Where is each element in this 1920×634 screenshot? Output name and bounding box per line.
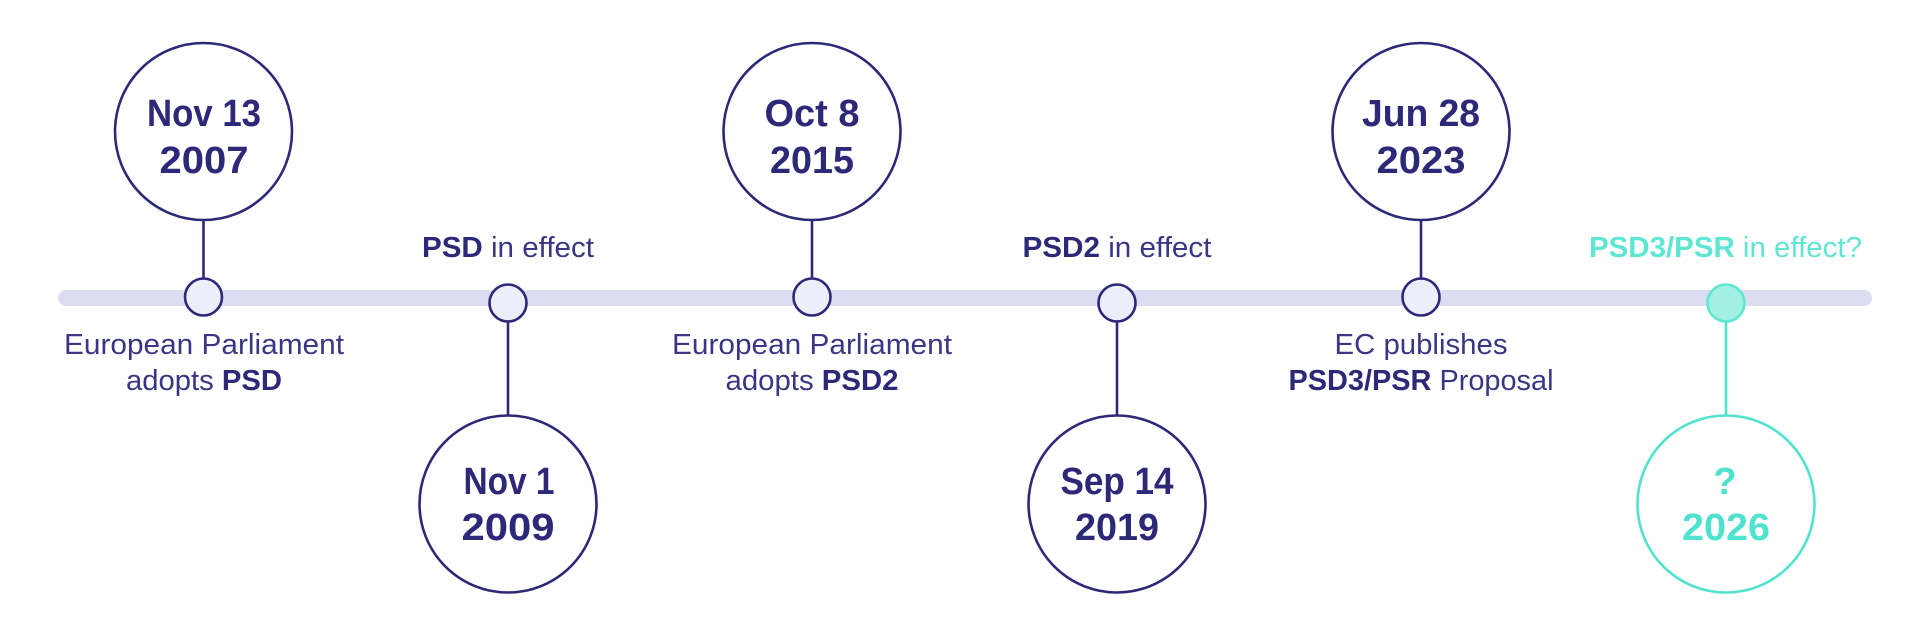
- date circle: [1028, 416, 1206, 592]
- date circle: [724, 43, 900, 220]
- date circle: [1332, 43, 1510, 220]
- timeline node: [490, 284, 526, 322]
- caption: [672, 329, 952, 397]
- timeline node: [794, 278, 830, 316]
- caption: PSD3/PSR Proposal: [1288, 365, 1554, 397]
- connector line: [1725, 321, 1727, 416]
- date text: 2015: [770, 140, 854, 182]
- date text: [147, 93, 261, 182]
- connector line: [1116, 321, 1118, 416]
- date text: 2007: [160, 140, 248, 182]
- date text: ?: [1713, 461, 1737, 503]
- caption: PSD2 in effect: [1022, 232, 1212, 264]
- date text: Nov 13: [147, 93, 261, 135]
- date text: Nov 1: [464, 461, 554, 503]
- date text: 2009: [462, 507, 554, 549]
- date text: [462, 461, 554, 549]
- timeline node: [185, 278, 222, 316]
- caption: PSD in effect: [422, 232, 594, 264]
- caption: EC publishes: [1334, 329, 1508, 361]
- caption: adopts PSD2: [726, 365, 898, 397]
- connector line: [1420, 220, 1422, 280]
- timeline node: [1098, 284, 1136, 322]
- caption: [64, 329, 344, 397]
- caption: PSD3/PSR in effect?: [1589, 232, 1862, 264]
- milestone: Nov 13 2007: [64, 43, 344, 397]
- connector line: [507, 321, 509, 416]
- timeline node: [1402, 278, 1440, 316]
- date text: 2023: [1376, 140, 1466, 182]
- date circle: [115, 43, 292, 220]
- connector line: [202, 220, 205, 280]
- date text: [1362, 93, 1480, 182]
- milestone: Jun 28 2023: [1288, 43, 1554, 397]
- date text: Jun 28: [1362, 93, 1480, 135]
- milestone: Sep 14 2019: [1022, 232, 1212, 592]
- date text: [1060, 461, 1174, 549]
- date text: Sep 14: [1060, 461, 1174, 503]
- date circle: [1638, 416, 1814, 592]
- connector line: [811, 220, 813, 280]
- date circle: [420, 416, 596, 592]
- caption: European Parliament: [672, 329, 952, 361]
- milestone: Oct 8 2015: [672, 43, 952, 397]
- date text: 2019: [1075, 507, 1159, 549]
- date text: [1682, 461, 1770, 549]
- caption: [1288, 329, 1554, 397]
- milestone: Nov 1 2009: [420, 232, 596, 592]
- date text: 2026: [1682, 507, 1770, 549]
- caption: European Parliament: [64, 329, 344, 361]
- date text: Oct 8: [764, 93, 860, 135]
- date text: [764, 93, 860, 182]
- caption: adopts PSD: [126, 365, 282, 397]
- timeline node: [1708, 284, 1744, 322]
- milestone: 2026: [1589, 232, 1862, 592]
- timeline bar: [58, 290, 1872, 306]
